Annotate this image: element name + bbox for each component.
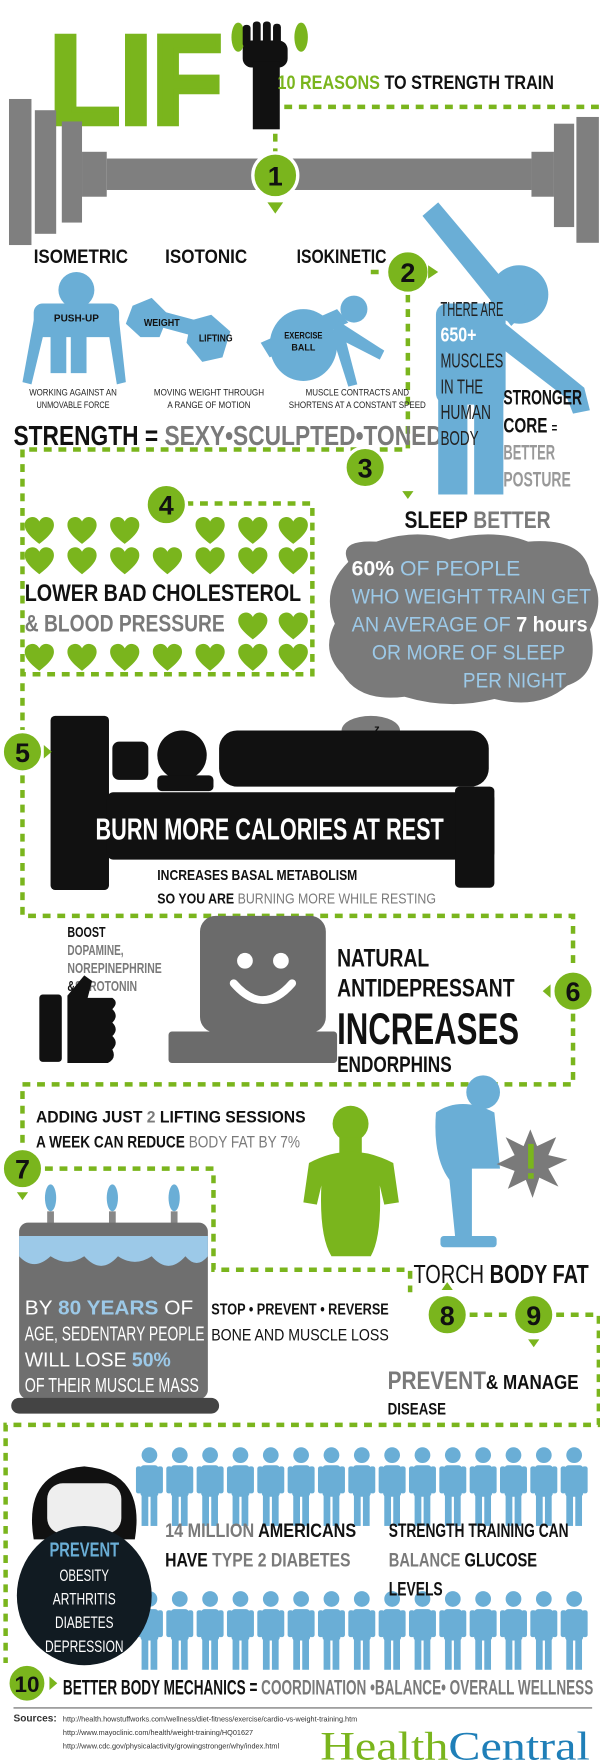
cholesterol text <box>25 580 301 637</box>
boost text: DOPAMINE, <box>67 943 124 959</box>
sleep cloud: AN AVERAGE OF 7 hours <box>352 613 588 637</box>
bone loss text: STOP • PREVENT • REVERSE <box>211 1302 389 1319</box>
icon: thumbs up <box>39 975 116 1063</box>
burn calories text: BURN MORE CALORIES AT REST <box>96 813 444 846</box>
glucose text: LEVELS <box>389 1580 443 1601</box>
kettlebell <box>17 1466 152 1665</box>
sources: http://health.howstuffworks.com/wellness/diet-fitness/exercise/cardio-vs-weight-training.htm <box>63 1714 357 1723</box>
kettlebell: DEPRESSION <box>45 1637 124 1656</box>
cake: BY 80 YEARS OF <box>25 1298 193 1320</box>
circle 4 <box>146 484 187 525</box>
muscles text: HUMAN <box>440 402 491 424</box>
captions: UNMOVABLE FORCE <box>37 400 110 410</box>
cholesterol text: & BLOOD PRESSURE <box>25 611 225 637</box>
sources: Sources: <box>13 1713 57 1724</box>
diabetes stats: 14 MILLION AMERICANS <box>165 1521 356 1542</box>
sleep heading: SLEEP BETTER <box>404 507 551 533</box>
circle 2 <box>387 251 438 293</box>
icon: exercise ball figure <box>261 296 384 387</box>
circle 3: 3 <box>358 454 373 484</box>
kettlebell: ARTHRITIS <box>53 1590 116 1609</box>
muscles text: MUSCLES <box>440 351 503 373</box>
big blue figure <box>387 202 590 494</box>
kettlebell: PREVENT <box>49 1539 120 1561</box>
icon: dumbbell: WEIGHT <box>144 318 181 329</box>
circle 2: 2 <box>400 258 415 288</box>
barbell <box>9 99 599 245</box>
exercise type labels: ISOMETRIC <box>34 247 128 268</box>
icon: push-up figure: PUSH-UP <box>54 313 99 324</box>
bone loss text <box>211 1302 389 1345</box>
glucose text: BALANCE GLUCOSE <box>389 1550 537 1571</box>
circle 6 <box>543 971 593 1011</box>
exercise type labels: ISOTONIC <box>165 247 247 268</box>
small z clouds: z <box>374 724 380 736</box>
cake <box>11 1184 219 1414</box>
sources <box>13 1713 357 1750</box>
captions <box>29 388 426 410</box>
body fat text: A WEEK CAN REDUCE BODY FAT BY 7% <box>36 1132 300 1151</box>
metabolism text: SO YOU ARE BURNING MORE WHILE RESTING <box>157 891 436 907</box>
circles 8 and 9: 8 <box>440 1301 455 1331</box>
stronger core <box>503 386 582 492</box>
diabetes stats <box>165 1521 356 1571</box>
kettlebell: DIABETES <box>55 1613 113 1632</box>
kettlebell: OBESITY <box>60 1566 109 1585</box>
title LIFT: LIF <box>49 10 222 151</box>
circle 1: 1 <box>268 161 283 191</box>
exercise type labels <box>34 247 387 268</box>
body fat text <box>36 1108 306 1151</box>
icon: belly figure <box>303 1106 399 1256</box>
muscles text: IN THE <box>440 376 483 398</box>
antidepressant text: ANTIDEPRESSANT <box>337 976 515 1003</box>
prevent manage disease: PREVENT& MANAGE <box>388 1368 579 1395</box>
circle 5 <box>2 732 52 772</box>
boost text <box>67 925 162 995</box>
sources: http://www.mayoclinic.com/health/weight-training/HQ01627 <box>63 1728 253 1737</box>
captions: MOVING WEIGHT THROUGH <box>154 388 264 398</box>
icon: smiley laptop <box>169 916 337 1063</box>
circle 6: 6 <box>566 977 581 1007</box>
antidepressant text: ENDORPHINS <box>337 1052 452 1077</box>
cake: WILL LOSE 50% <box>25 1349 171 1371</box>
icon: exercise ball figure: BALL <box>291 343 316 353</box>
exercise type labels: ISOKINETIC <box>297 247 387 268</box>
boost text: NOREPINEPHRINE <box>67 961 162 977</box>
captions: WORKING AGAINST AN <box>29 388 117 398</box>
prevent manage disease <box>388 1368 579 1419</box>
hearts <box>25 517 308 671</box>
circle 1 <box>253 153 298 214</box>
circle 3 <box>345 447 413 499</box>
icon: push-up figure <box>22 272 126 384</box>
muscles text: BODY <box>440 428 479 450</box>
body fat text: ADDING JUST 2 LIFTING SESSIONS <box>36 1108 306 1127</box>
antidepressant text: INCREASES <box>337 1003 519 1054</box>
captions: MUSCLE CONTRACTS AND <box>306 388 409 398</box>
icon: dumbbell: LIFTING <box>199 334 233 345</box>
stronger core: BETTER <box>503 441 555 465</box>
antidepressant text: NATURAL <box>337 945 429 972</box>
small z clouds: z <box>360 728 366 740</box>
cholesterol text: LOWER BAD CHOLESTEROL <box>25 580 301 606</box>
boost text: BOOST <box>67 925 106 941</box>
circle 7: 7 <box>15 1155 30 1185</box>
prevent manage disease: DISEASE <box>388 1400 446 1419</box>
bone loss text: BONE AND MUSCLE LOSS <box>211 1326 389 1345</box>
cake: AGE, SEDENTARY PEOPLE <box>25 1324 204 1346</box>
stronger core: CORE = <box>503 414 557 438</box>
glucose text <box>389 1521 569 1601</box>
diabetes stats: HAVE TYPE 2 DIABETES <box>165 1550 351 1571</box>
circle 7 <box>2 1148 43 1200</box>
metabolism text <box>157 868 436 907</box>
metabolism text: INCREASES BASAL METABOLISM <box>157 868 357 884</box>
circle 5: 5 <box>15 738 30 768</box>
cake: OF THEIR MUSCLE MASS <box>25 1375 199 1397</box>
icon: dumbbell <box>126 298 233 362</box>
circle 10: 10 <box>14 1672 39 1697</box>
icon: fist with dumbbell <box>231 21 308 129</box>
small z clouds: z <box>240 739 246 751</box>
muscles text: 650+ <box>440 325 476 347</box>
circles 8 and 9: 9 <box>526 1301 541 1331</box>
icon: exercise ball figure: EXERCISE <box>284 330 322 340</box>
subtitle: 10 REASONS TO STRENGTH TRAIN <box>278 73 554 94</box>
boost text: &SEROTONIN <box>67 979 137 995</box>
sleep cloud: OR MORE OF SLEEP <box>372 641 565 665</box>
icon: scale figure <box>435 1075 567 1247</box>
muscles text <box>440 299 503 450</box>
sources: http://www.cdc.gov/physicalactivity/growingstronger/why/index.html <box>63 1741 279 1750</box>
sleep cloud <box>329 534 598 704</box>
small z clouds: z <box>290 737 296 749</box>
strength heading: STRENGTH = SEXY•SCULPTED•TONED <box>13 420 443 451</box>
antidepressant text <box>337 945 519 1077</box>
people rows <box>136 1447 588 1670</box>
sleep cloud: 60% OF PEOPLE <box>352 556 520 580</box>
circles 8 and 9 <box>427 1282 554 1347</box>
sleep cloud: PER NIGHT <box>463 669 566 693</box>
circle 10 <box>8 1664 57 1702</box>
circle 4: 4 <box>159 491 174 521</box>
small z clouds <box>234 716 400 752</box>
captions: A RANGE OF MOTION <box>167 400 251 410</box>
bed <box>51 716 494 890</box>
muscles text: THERE ARE <box>440 299 503 321</box>
captions: SHORTENS AT A CONSTANT SPEED <box>289 400 426 410</box>
